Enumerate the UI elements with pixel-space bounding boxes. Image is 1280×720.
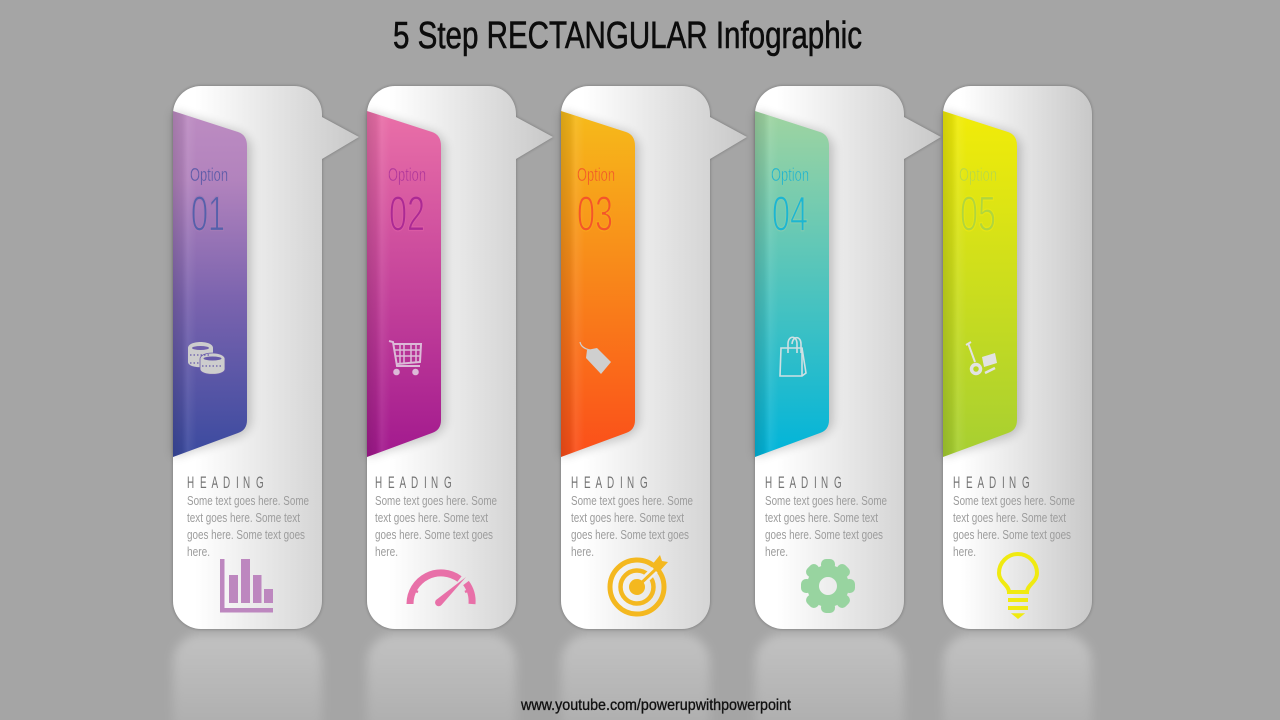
body text: step 2: text goes here. Some text [375, 510, 488, 525]
option label: step 4: Option [771, 165, 809, 185]
option label: step 2: Option [388, 165, 426, 185]
option label: step 5: Option [959, 165, 997, 185]
body text: step 3: text goes here. Some text [571, 510, 684, 525]
icon: target with arrow [610, 555, 668, 614]
option label: step 3: Option [577, 165, 615, 185]
reflection: step 2 [367, 634, 516, 720]
body text: step 1: goes here. Some text goes [187, 527, 305, 542]
icon: price tag [580, 342, 611, 374]
icon: coins [188, 342, 225, 374]
icon: shopping cart [389, 341, 421, 374]
heading: step 1: HEADING [187, 473, 264, 492]
footer url: www.youtube.com/powerupwithpowerpoint [520, 697, 791, 714]
icon: shopping bag [780, 337, 806, 376]
body text: step 3 [571, 493, 693, 559]
card: step 4 [755, 86, 941, 629]
body text: step 3: goes here. Some text goes [571, 527, 689, 542]
heading: step 4: HEADING [765, 473, 842, 492]
icon: bar chart [220, 559, 273, 612]
panel: step 5 [943, 86, 1092, 720]
body text: step 2: here. [375, 544, 398, 559]
icon: light bulb [999, 554, 1037, 618]
card: step 2 [367, 86, 553, 629]
body text: step 1: here. [187, 544, 210, 559]
body text: step 5: here. [953, 544, 976, 559]
body text: step 5: text goes here. Some text [953, 510, 1066, 525]
heading: step 3: HEADING [571, 473, 648, 492]
icon: gear [801, 559, 855, 613]
option label: step 1: Option [190, 165, 228, 185]
reflection: step 4 [755, 634, 904, 720]
card: step 1 [173, 86, 359, 629]
body text: step 1: Some text goes here. Some [187, 493, 309, 508]
panel: step 1 [173, 86, 359, 720]
body text: step 4: here. [765, 544, 788, 559]
panel: step 2 [367, 86, 553, 720]
body text: step 3: Some text goes here. Some [571, 493, 693, 508]
body text: step 5: goes here. Some text goes [953, 527, 1071, 542]
icon: speedometer [410, 571, 472, 606]
card: step 5 [943, 86, 1092, 629]
body text: step 4: Some text goes here. Some [765, 493, 887, 508]
body text: step 5: Some text goes here. Some [953, 493, 1075, 508]
icon: hand truck [966, 342, 997, 374]
body text: step 2 [375, 493, 497, 559]
title: 5 Step RECTANGULAR Infographic [393, 15, 862, 57]
number: step 4: 04 [772, 188, 808, 242]
heading: step 2: HEADING [375, 473, 452, 492]
number: step 2: 02 [389, 188, 425, 242]
panel: step 3 [561, 86, 747, 720]
reflection: step 3 [561, 634, 710, 720]
body text: step 1 [187, 493, 309, 559]
body text: step 3: here. [571, 544, 594, 559]
heading: step 5: HEADING [953, 473, 1030, 492]
body text: step 2: Some text goes here. Some [375, 493, 497, 508]
reflection: step 1 [173, 634, 322, 720]
panel: step 4 [755, 86, 941, 720]
number: step 1: 01 [191, 188, 225, 242]
body text: step 4: text goes here. Some text [765, 510, 878, 525]
body text: step 4 [765, 493, 887, 559]
number: step 3: 03 [577, 188, 613, 242]
body text: step 5 [953, 493, 1075, 559]
body text: step 2: goes here. Some text goes [375, 527, 493, 542]
body text: step 1: text goes here. Some text [187, 510, 300, 525]
reflection: step 5 [943, 634, 1092, 720]
body text: step 4: goes here. Some text goes [765, 527, 883, 542]
number: step 5: 05 [960, 188, 996, 242]
card: step 3 [561, 86, 747, 629]
